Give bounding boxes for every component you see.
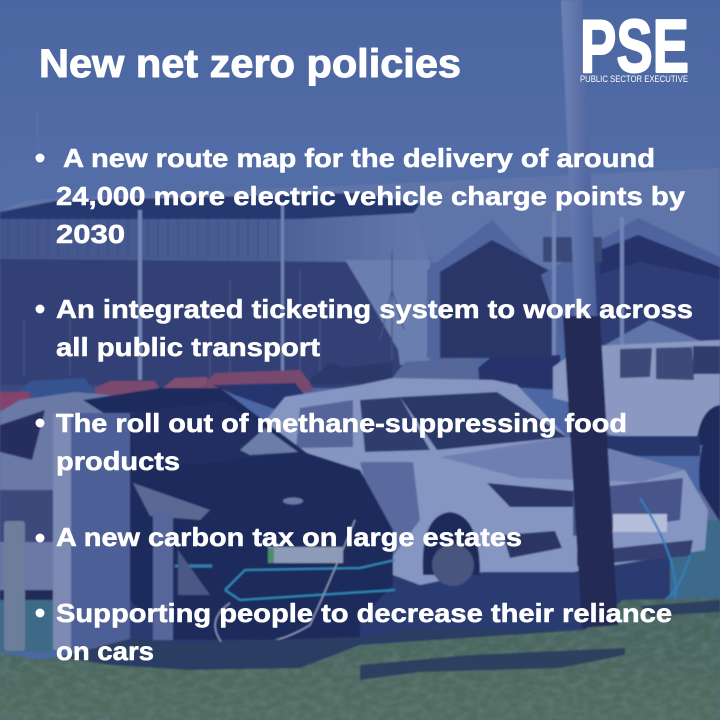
bullet 5: car reliance: Supporting people to decrease their reliance [56,598,672,628]
white car wheel [423,512,480,575]
pickup truck [553,340,720,456]
grass [0,598,720,720]
title: New net zero policies [39,42,461,86]
bullet 3: methane-suppressing food [36,408,627,476]
kia badge [283,498,303,504]
headlight [133,483,210,520]
hood [440,437,685,482]
charging cables [215,520,355,645]
bullet 1: charge points: 2030 [56,219,125,249]
distant roof and sign [605,320,710,345]
bullet 2: integrated ticketing: An integrated ticketing system to work across [56,294,693,324]
grass shadows [60,628,585,670]
side windows [296,400,353,448]
ground behind cars [0,540,720,650]
wheel far right [699,415,720,522]
bollard [4,521,25,651]
white car grille [573,478,683,536]
bullet 3: methane-suppressing food: The roll out of methane-suppressing food [56,408,627,438]
bare trees [24,250,404,380]
ribbed roof [0,213,430,262]
lamp post [561,0,618,628]
dark eaves band [0,193,420,220]
wall [0,258,430,388]
bullet 1: charge points: 24,000 more electric vehicle charge points by [56,181,686,211]
bullet 4: carbon tax: A new carbon tax on large estates [56,522,522,552]
ship mast [0,112,72,202]
bullet list [36,143,693,666]
white car intake [503,531,562,558]
bullet 5: car reliance [36,598,672,666]
gable two [541,218,720,348]
windscreen [400,392,567,450]
sky [0,0,720,260]
upper roof right [0,168,720,275]
white car plate [613,514,667,532]
background cars row [0,355,560,418]
grass texture [0,598,720,720]
door reflection [360,462,420,560]
dark electric car [83,388,395,640]
bullet 1: charge points [36,143,686,249]
bullet 5: car reliance: on cars [56,636,154,666]
PSE logo: PUBLIC SECTOR EXECUTIVE [580,74,688,84]
bullet 2: integrated ticketing: all public transport [56,332,320,362]
silver car left [0,392,130,600]
gable one [427,220,560,360]
bullet 2: integrated ticketing [36,294,693,362]
bullet 3: methane-suppressing food: products [56,446,180,476]
white car headlight [487,483,573,507]
number plate [268,547,343,563]
light curved wall [345,260,430,365]
charger post [53,413,173,650]
bullet 1: charge points: A new route map for the delivery of around [63,143,655,173]
white car [262,378,708,586]
light poles [138,205,624,380]
